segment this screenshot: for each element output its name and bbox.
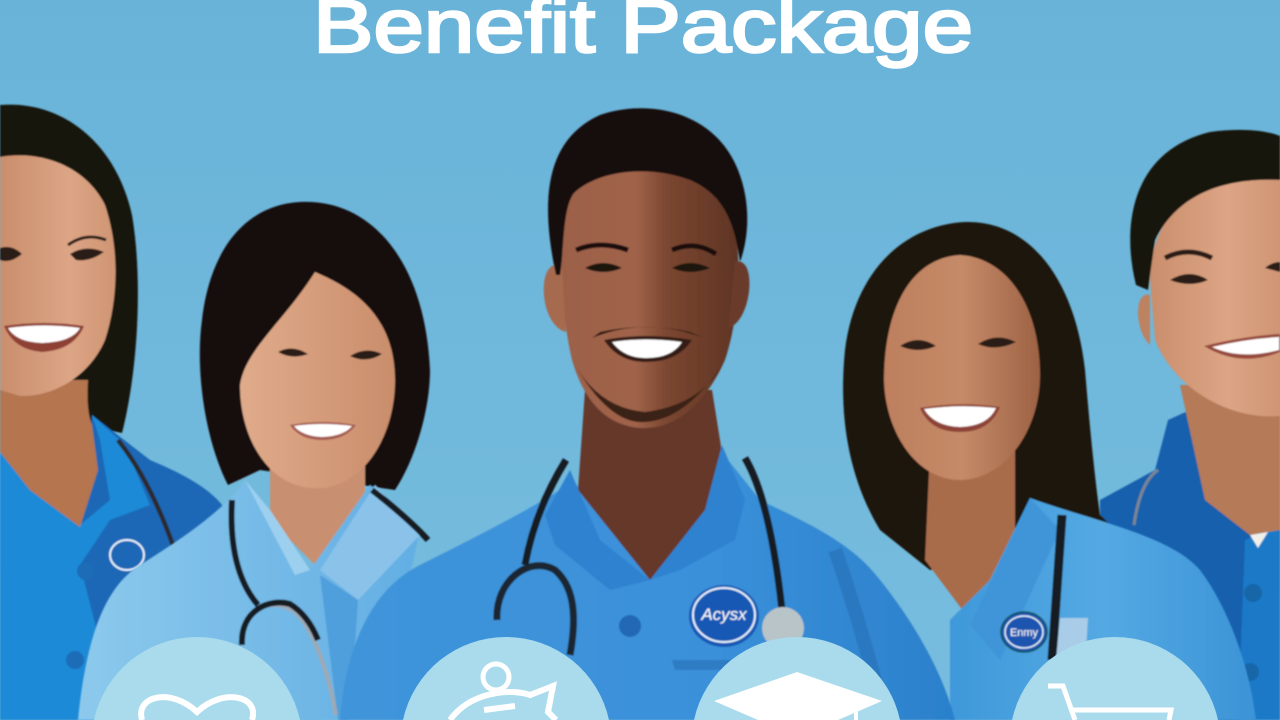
person: center man (340, 108, 955, 720)
person: right man (1100, 130, 1280, 720)
icon circle: education (694, 637, 900, 720)
person: far left woman (0, 105, 229, 720)
badge: center man: Acysx (700, 605, 747, 624)
badge: right woman (1001, 612, 1047, 652)
icon circle: savings (403, 637, 609, 720)
icon circle: shopping cart (1012, 637, 1218, 720)
badge: center man (689, 585, 759, 647)
person: second woman (78, 202, 430, 720)
person: right woman (843, 222, 1256, 720)
badge: right woman: Enmy (1010, 627, 1039, 639)
icon circle: health (94, 637, 300, 720)
